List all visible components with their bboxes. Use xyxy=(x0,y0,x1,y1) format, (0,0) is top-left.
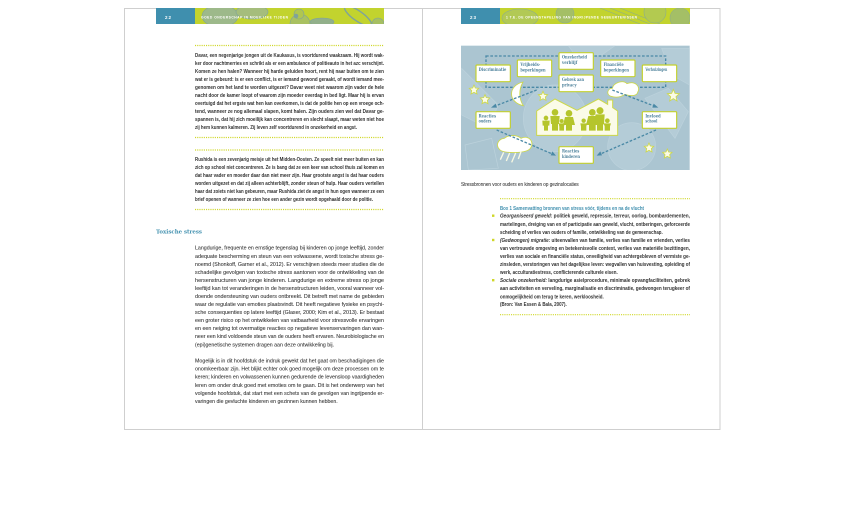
bullet: sociale onzekerheid: Sociale onzekerheid: langdurige asielprocedure, minimale opvangfaciliteiten, gebrek xyxy=(500,278,690,284)
box: Financiële beperkingen: Financiële xyxy=(604,61,624,68)
box: Financiële beperkingen: beperkingen xyxy=(604,67,630,73)
bullet: sociale onzekerheid xyxy=(500,278,690,300)
body text: closing paragraph: volgende hoofdstuk, dat start met een schets van de gevolgen van ingrijpende er- xyxy=(195,391,384,397)
caption: Stressbronnen voor ouders en kinderen op gezinslocaties xyxy=(461,182,579,188)
heading: Toxische stress: Toxische stress xyxy=(156,230,202,236)
box: Reacties kinderen: Reacties xyxy=(562,149,580,155)
box: Verhuizingen xyxy=(642,65,677,82)
icon: rain cloud xyxy=(498,136,532,162)
case text: Davar: wat er is gebeurd: is er een conflict, is er iemand gewond geraakt, of wordt iemand mee- xyxy=(194,77,384,83)
body text: closing paragraph: leren om onder druk goed met emoties om te gaan. Dit is het onderwerp van het xyxy=(195,383,385,389)
box: Discriminatie xyxy=(476,65,510,82)
case text: Davar: overtuigd dat het ergste wat hen kan overkomen, is dat de politie hen op een vroege och- xyxy=(195,101,384,107)
body text: toxische stress: waar de regulatie van emoties plaatsvindt. Dit heeft negatieve fysieke en psychi- xyxy=(195,302,384,308)
box: Invloed school xyxy=(642,112,677,128)
case text: Davar xyxy=(194,53,384,131)
case text: Rushida: brief openen of wanneer ze zien hoe een ander gezin wordt opgehaald door de politie. xyxy=(195,197,373,203)
box: Gebrek aan privacy xyxy=(559,75,593,92)
case text: Rushida: Rushida is een zevenjarig meisje uit het Midden-Oosten. Ze speelt niet meer buiten en kan xyxy=(195,157,384,163)
body text: toxische stress: hersenstructuren van jonge kinderen. Langdurige en extreme stress op jonge xyxy=(195,278,384,284)
icon: moon xyxy=(512,82,523,106)
body text: toxische stress: (epi)genetische systemen dragen aan deze ontwikkeling bij. xyxy=(195,342,334,348)
case text: Davar: spannen is, dat hij zich moeilijk kan concentreren en slecht slaapt, maar weten niet hoe xyxy=(195,117,384,123)
body text: closing paragraph: keren; kinderen en volwassenen kunnen gedurende de levensloop vaardigheden xyxy=(195,374,384,380)
right page header band xyxy=(461,8,690,24)
bullet: gedwongen migratie: van vertrouwde omgeving en betekenisvolle context, verlies van materiële bezittingen, xyxy=(500,246,690,252)
box: Verhuizingen: Verhuizingen xyxy=(645,67,668,73)
case text: Rushida: haar dat zoiets niet kan gebeuren, maar Rushida ziet de angst in hun ogen wanneer ze een xyxy=(195,189,384,195)
body text: toxische stress: schadelijke gevolgen van toxische stress aantonen voor de ontwikkeling van de xyxy=(195,270,384,276)
box: Onzekerheid verblijf xyxy=(559,53,593,69)
stress source boxes xyxy=(476,53,677,163)
page number 22: 22 xyxy=(165,15,171,20)
body text: toxische stress: en een neiging tot overmatige reacties op negatieve levenservaringen dan wan- xyxy=(195,326,384,332)
diagram background xyxy=(461,46,690,171)
bullet: georganiseerd geweld xyxy=(500,214,690,236)
box: Reacties ouders: ouders xyxy=(479,119,492,125)
box: Onzekerheid verblijf: verblijf xyxy=(561,60,578,66)
box: Reacties kinderen xyxy=(559,147,593,163)
body text: toxische stress: noemd (Shonkoff, Garner et al., 2012). Er verschijnen steeds meer studies die de xyxy=(195,262,384,268)
body text: toxische stress: sche consequenties op latere leeftijd (Glaser, 2000; Kim et al., 2013). Er bestaat xyxy=(195,310,385,316)
body text: toxische stress: Langdurige, frequente en ernstige tegenslag bij kinderen op jonge leeftijd, zonder xyxy=(195,246,384,252)
body text: closing paragraph: Mogelijk is in dit hoofdstuk de indruk gewekt dat het gaat om beschadigingen die xyxy=(195,358,384,364)
icon: stars xyxy=(469,85,679,158)
box: Onzekerheid verblijf: Onzekerheid xyxy=(562,55,588,61)
bullet: georganiseerd geweld: Georganiseerd geweld: politiek geweld, repressie, terreur, oorlog, bombardementen, xyxy=(500,214,690,220)
source note: (Bron: Van Essen & Bala, 2007). xyxy=(500,302,567,308)
bullet: gedwongen migratie: zinsleden, verstoringen van het dagelijkse leven: wegvallen van huisvesting, opleiding of xyxy=(500,262,690,268)
bullet: gedwongen migratie: werk, acculturatiestress, conflicterende culturele eisen. xyxy=(499,270,618,276)
body text: toxische stress xyxy=(195,246,385,348)
bullet: gedwongen migratie: (Gedwongen) migratie: uiteenvallen van familie, verlies van familie en vrienden, verlies xyxy=(500,238,690,244)
page number 23: 23 xyxy=(470,15,476,20)
bullet markers xyxy=(492,214,494,281)
box: Discriminatie: Discriminatie xyxy=(479,67,506,73)
case text: Rushida: zich op school niet concentreren. Ze is bang dat ze een keer van school thuis zal komen en xyxy=(195,165,384,171)
left page header band xyxy=(156,8,384,24)
box: Reacties kinderen: kinderen xyxy=(562,154,581,160)
body text: toxische stress: leeftijd kan tot veranderingen in de hersenstructuren leiden, vooral wanneer vol- xyxy=(195,286,384,292)
box: Reacties ouders: Reacties xyxy=(479,114,496,120)
box 1: stress sources summary xyxy=(492,206,690,308)
icon: cloud xyxy=(608,82,639,97)
bullet: sociale onzekerheid: aan activiteiten en verveling, marginalisatie en discriminatie, gedwongen terugkeer of xyxy=(500,286,690,292)
bullet: georganiseerd geweld: scheiding of verlies van ouders of familie, ontwikkeling van de gemeenschap. xyxy=(500,230,663,236)
box: Financiële beperkingen xyxy=(601,60,635,77)
case text: Davar: Komen ze hen halen? Wanneer hij harde geluiden hoort, rent hij naar buiten om te zien xyxy=(195,69,384,75)
box: Reacties ouders xyxy=(476,112,510,128)
dashed frame around stress sources xyxy=(486,56,666,87)
body text: toxische stress: adequate bescherming en steun van een volwassene, wordt toxische stress ge- xyxy=(195,254,384,260)
case text: Rushida xyxy=(194,157,384,203)
icon: house with two families xyxy=(537,99,618,135)
box: Vrijheidsbeperkingen xyxy=(517,60,552,77)
arrows between blocks xyxy=(494,90,656,154)
box: Invloed school: school xyxy=(645,119,658,125)
box heading: Box 1 Samenvatting bronnen van stress vóór, tijdens en na de vlucht xyxy=(500,206,644,212)
case text: Davar: zij hem kunnen kalmeren. Zij leven zelf voortdurend in onzekerheid en angst. xyxy=(195,125,357,131)
case text: Davar: nacht door de kamer loopt of waarom zijn moeder overdag in bed ligt. Maar hij is ervan xyxy=(195,93,384,99)
bullet: gedwongen migratie xyxy=(499,238,690,276)
bullet: georganiseerd geweld: martelingen, dreiging van en of participatie aan geweld, vlucht, ontberingen, geforceerde xyxy=(500,222,690,228)
case text: Davar: ker door nachtmerries en schrikt als er een ambulance of politieauto in het azc verschijnt. xyxy=(195,61,384,67)
page frame: spread of two pages xyxy=(124,8,720,430)
divider xyxy=(195,44,384,46)
body text: closing paragraph xyxy=(195,358,385,405)
bullet: sociale onzekerheid: onmogelijkheid om terug te keren, werkloosheid. xyxy=(500,294,604,300)
running title: 1 T.E. DE OPEENSTAPELING VAN INGRIJPENDE GEBEURTENISSEN xyxy=(506,16,638,20)
case text: Rushida: dat haar vader en moeder daar dan niet meer zijn. Haar grootste angst is dat haar ouders xyxy=(195,173,384,179)
box: Gebrek aan privacy: Gebrek aan xyxy=(562,77,585,83)
case text: Davar: genomen om het land te worden uitgezet? Davar weet niet waarom zijn vader de hele xyxy=(195,85,384,91)
running title: GOED ONDERSCHAP IN MOEILIJKE TIJDEN xyxy=(201,16,289,20)
bullet: gedwongen migratie: verlies van sociale en financiële status, onveiligheid van achtergebleven of vermiste ge- xyxy=(500,254,690,260)
box: Vrijheidsbeperkingen: Vrijheids- xyxy=(520,62,540,68)
case text: Rushida: worden uitgezet en dat zij alleen achterblijft, zonder steun of hulp. Haar ouders vertellen xyxy=(194,181,384,187)
body text: toxische stress: doende ondersteuning van ouders ontbreekt. Dit betreft met name de gebieden xyxy=(195,294,384,300)
box: Gebrek aan privacy: privacy xyxy=(562,82,577,88)
case text: Davar: tend, wanneer ze nog allemaal slapen, komt halen. Zijn ouders zien wel dat Davar ge- xyxy=(195,109,384,115)
case text: Davar: Davar, een negenjarige jongen uit de Kaukasus, is voortdurend waakzaam. Hij wordt wak- xyxy=(195,53,384,59)
body text: closing paragraph: varingen die gevluchte kinderen en gezinnen kunnen hebben. xyxy=(195,399,338,405)
body text: closing paragraph: onomkeerbaar zijn. Het blijkt echter ook goed mogelijk om deze processen om te xyxy=(195,366,384,372)
box: Vrijheidsbeperkingen: beperkingen xyxy=(520,67,546,73)
diagram: stress sources for parents and children xyxy=(461,46,690,171)
body text: toxische stress: neer een kind voldoende steun van de ouders heeft ervaren. Neurobiologische en xyxy=(195,334,384,340)
body text: toxische stress: een groter risico op het ontwikkelen van vatbaarheid voor stressvolle ervaringen xyxy=(195,318,384,324)
box: Invloed school: Invloed xyxy=(645,114,661,120)
